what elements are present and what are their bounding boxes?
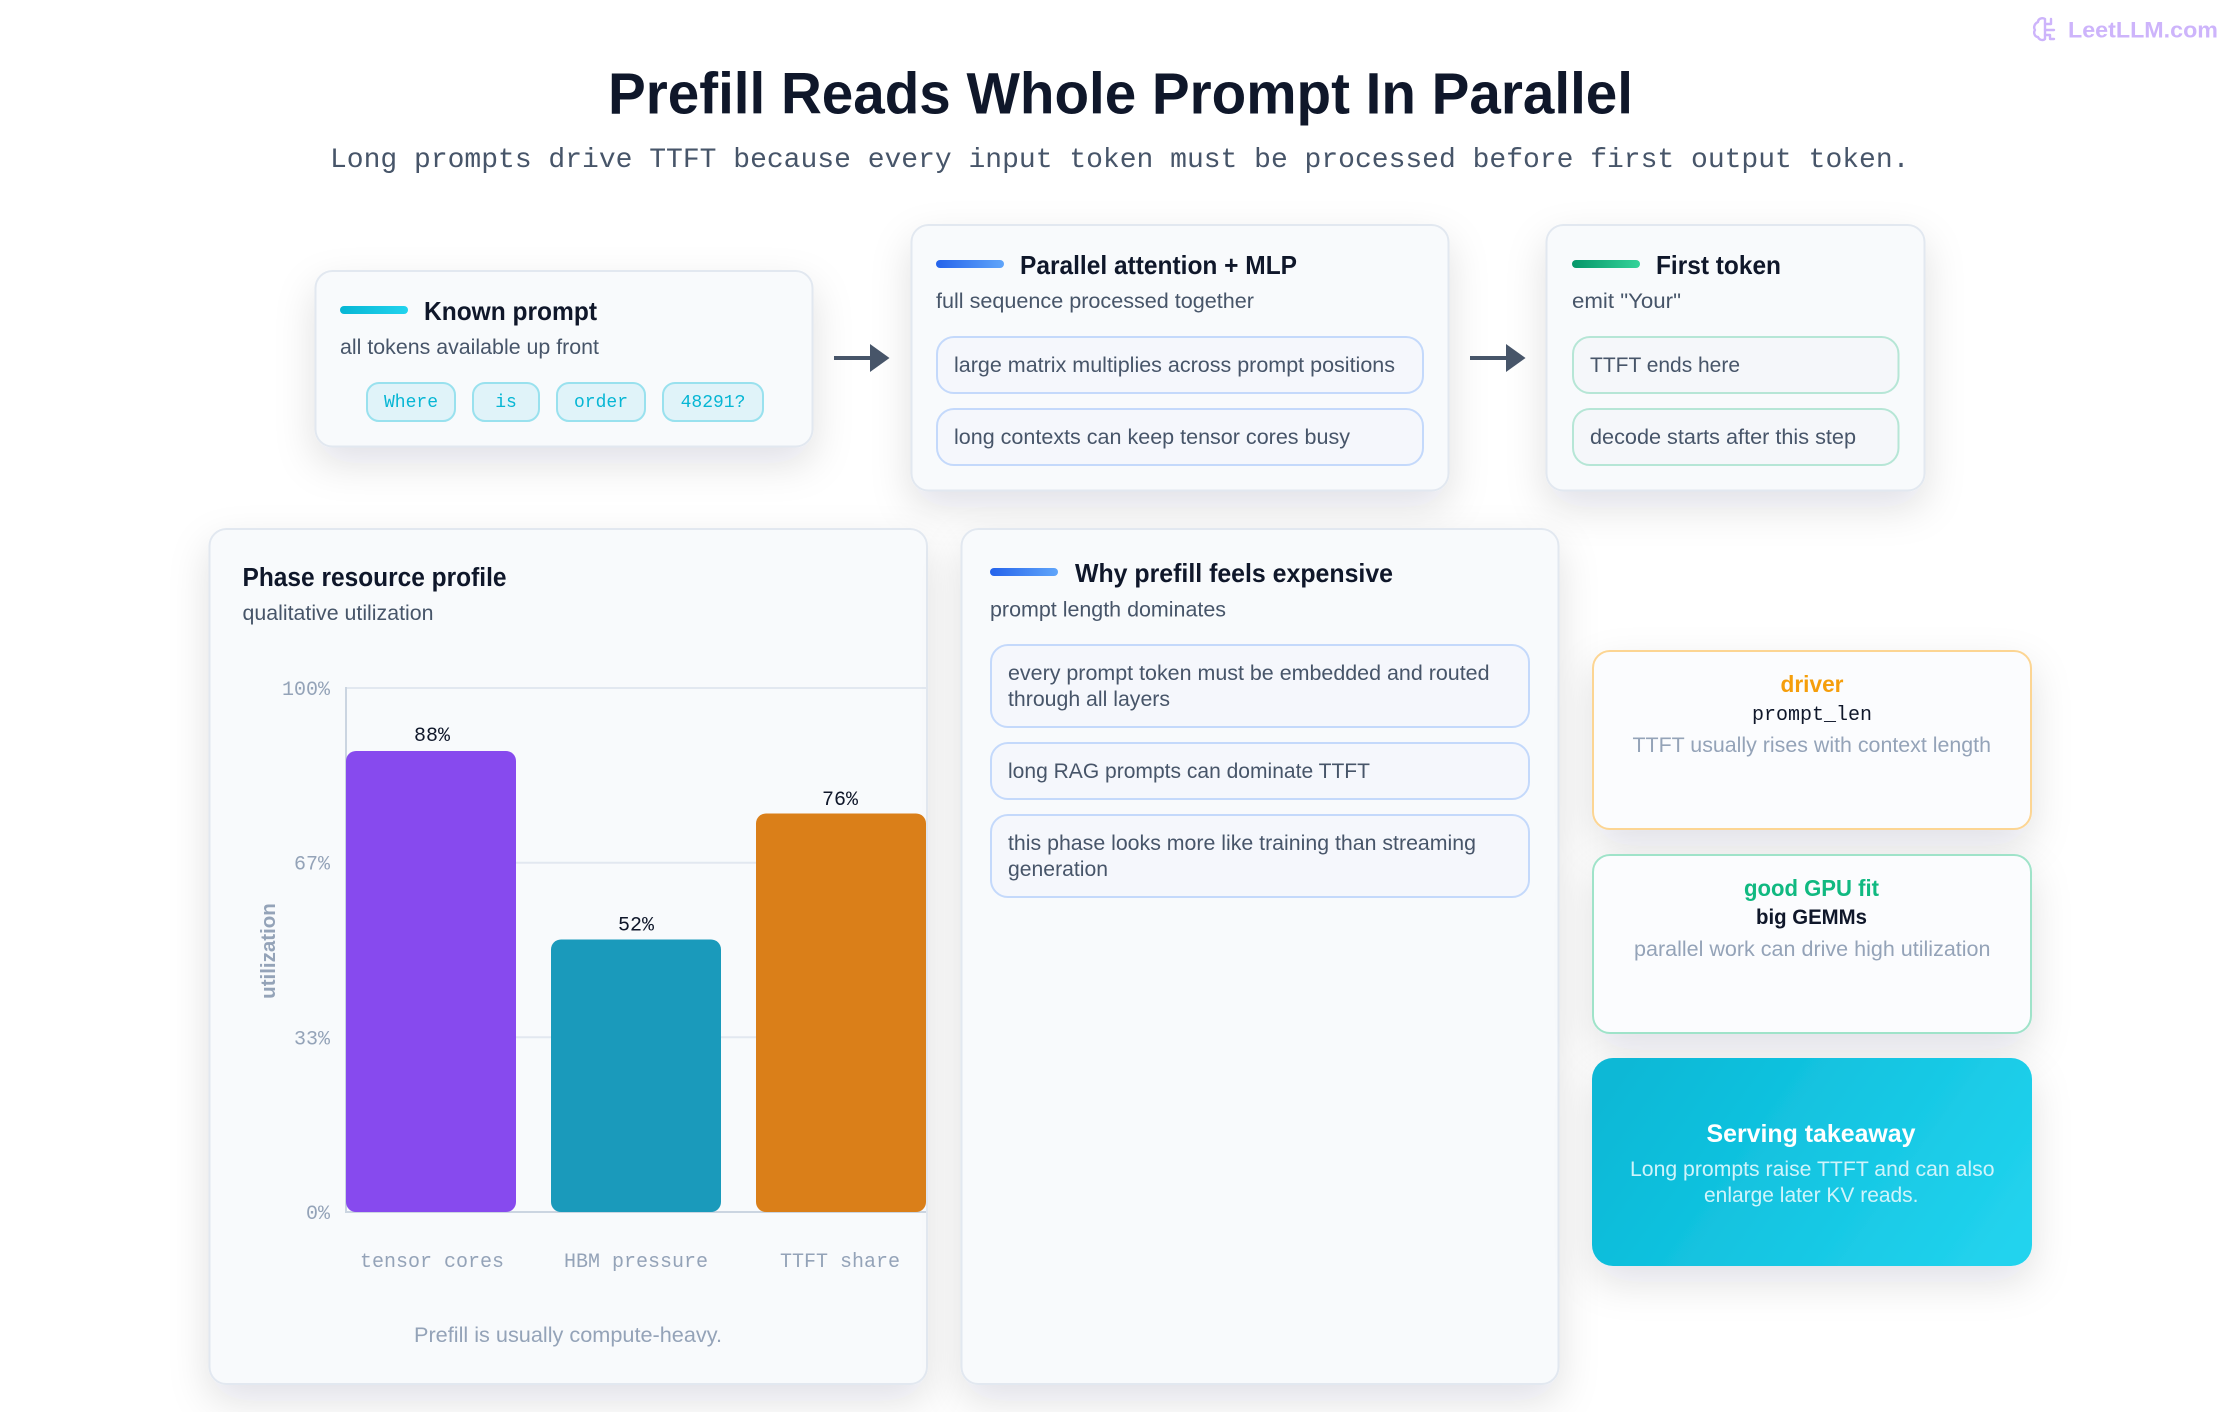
token chips: order [574,393,628,413]
bar chart [257,679,926,1274]
y axis ticks: 33% [294,1028,331,1052]
bar: HBM pressure 52%: HBM pressure [564,1251,708,1274]
value: prompt_len: prompt_len [1752,704,1872,727]
note: TTFT ends [1573,337,1898,393]
description: parallel work can drive high utilization [1634,938,1990,961]
bar: TTFT share 76% [756,789,926,1274]
heading: phase resource profile: Phase resource profile [242,564,506,592]
body text [1630,1158,1994,1207]
token chips: 48291? [681,393,745,413]
subheading: full sequence processed together [936,290,1254,313]
panel: why prefill feels expensive [962,529,1558,1384]
accent bar: green [1572,260,1640,268]
bar: tensor cores 88%: tensor cores [360,1251,504,1274]
y axis ticks: 0% [306,1203,331,1226]
bar: HBM pressure 52% [551,914,721,1274]
watermark: LeetLLM.com [2034,18,2218,42]
heading: first token: First token [1656,250,1781,280]
brand text: LeetLLM.com [2068,18,2218,42]
description: TTFT usually rises with context length [1632,734,1991,757]
note: every prompt token: every prompt token must be embedded and routed [1008,662,1490,685]
label: good GPU fit: good GPU fit [1744,875,1879,901]
heading: why prefill: Why prefill feels expensive [1075,558,1393,588]
icon: brain circuit [2034,18,2054,40]
note: this phase [991,815,1529,897]
note: long RAG prompts: long RAG prompts can dominate TTFT [1008,760,1370,783]
note: every prompt token [991,645,1529,727]
card: good GPU fit [1593,855,2031,1033]
accent bar: cyan [340,306,408,314]
card: serving takeaway [1592,1058,2032,1266]
panel: phase resource profile [210,529,927,1384]
subtitle: Long prompts drive TTFT because every input token must be processed before first output token. [330,145,1909,176]
panel: parallel attention + MLP [912,225,1448,490]
caption: Prefill is usually compute-heavy. [414,1324,722,1347]
note: matrix multiplies [937,337,1423,393]
value: big GEMMs: big GEMMs [1756,906,1867,929]
note: this phase: this phase looks more like training than streaming [1008,832,1476,855]
note: decode starts [1573,409,1898,465]
arrow: attention to first token [1470,344,1526,372]
accent bar: blue [936,260,1004,268]
heading: parallel attention: Parallel attention + MLP [1020,250,1297,280]
subheading: prompt length dominates [990,598,1226,622]
note: decode starts: decode starts after this step [1590,426,1856,449]
note: long RAG prompts [991,743,1529,799]
body text: Long prompts raise TTFT and can also [1630,1158,1994,1181]
subheading: qualitative utilization [242,602,434,625]
y axis title: utilization [257,903,280,999]
note: long contexts: long contexts can keep tensor cores busy [954,426,1351,449]
y axis ticks: 100% [282,679,331,702]
subheading: emit "Your" [1572,290,1681,313]
bar: TTFT share 76%: TTFT share [780,1251,900,1274]
note: TTFT ends: TTFT ends here [1590,354,1740,377]
arrow: prompt to attention [834,344,890,372]
token chips: Where [384,393,438,413]
heading: known prompt: Known prompt [424,296,597,326]
y axis ticks [282,679,331,1226]
panel: first token [1546,225,1924,490]
token chips: is [495,393,517,413]
bar: tensor cores 88% [346,725,516,1274]
card: driver [1593,651,2031,829]
title: Prefill Reads Whole Prompt In Parallel [608,62,1633,126]
note: every prompt token: through all layers [1008,688,1170,711]
y axis ticks: 67% [294,854,331,876]
accent bar: blue [990,568,1058,576]
bar: HBM pressure 52%: 52% [618,914,655,938]
bar: tensor cores 88%: 88% [414,725,451,748]
token chips [367,383,763,421]
body text: enlarge later KV reads. [1704,1184,1918,1207]
subheading: all tokens available up front [340,336,599,359]
note: matrix multiplies: large matrix multiplies across prompt positions [954,354,1395,377]
bar: TTFT share 76%: 76% [822,789,859,812]
note: this phase: generation [1008,858,1108,881]
heading: serving takeaway: Serving takeaway [1706,1120,1916,1148]
note: long contexts [937,409,1423,465]
panel: known prompt [316,271,812,446]
label: driver: driver [1780,671,1844,697]
